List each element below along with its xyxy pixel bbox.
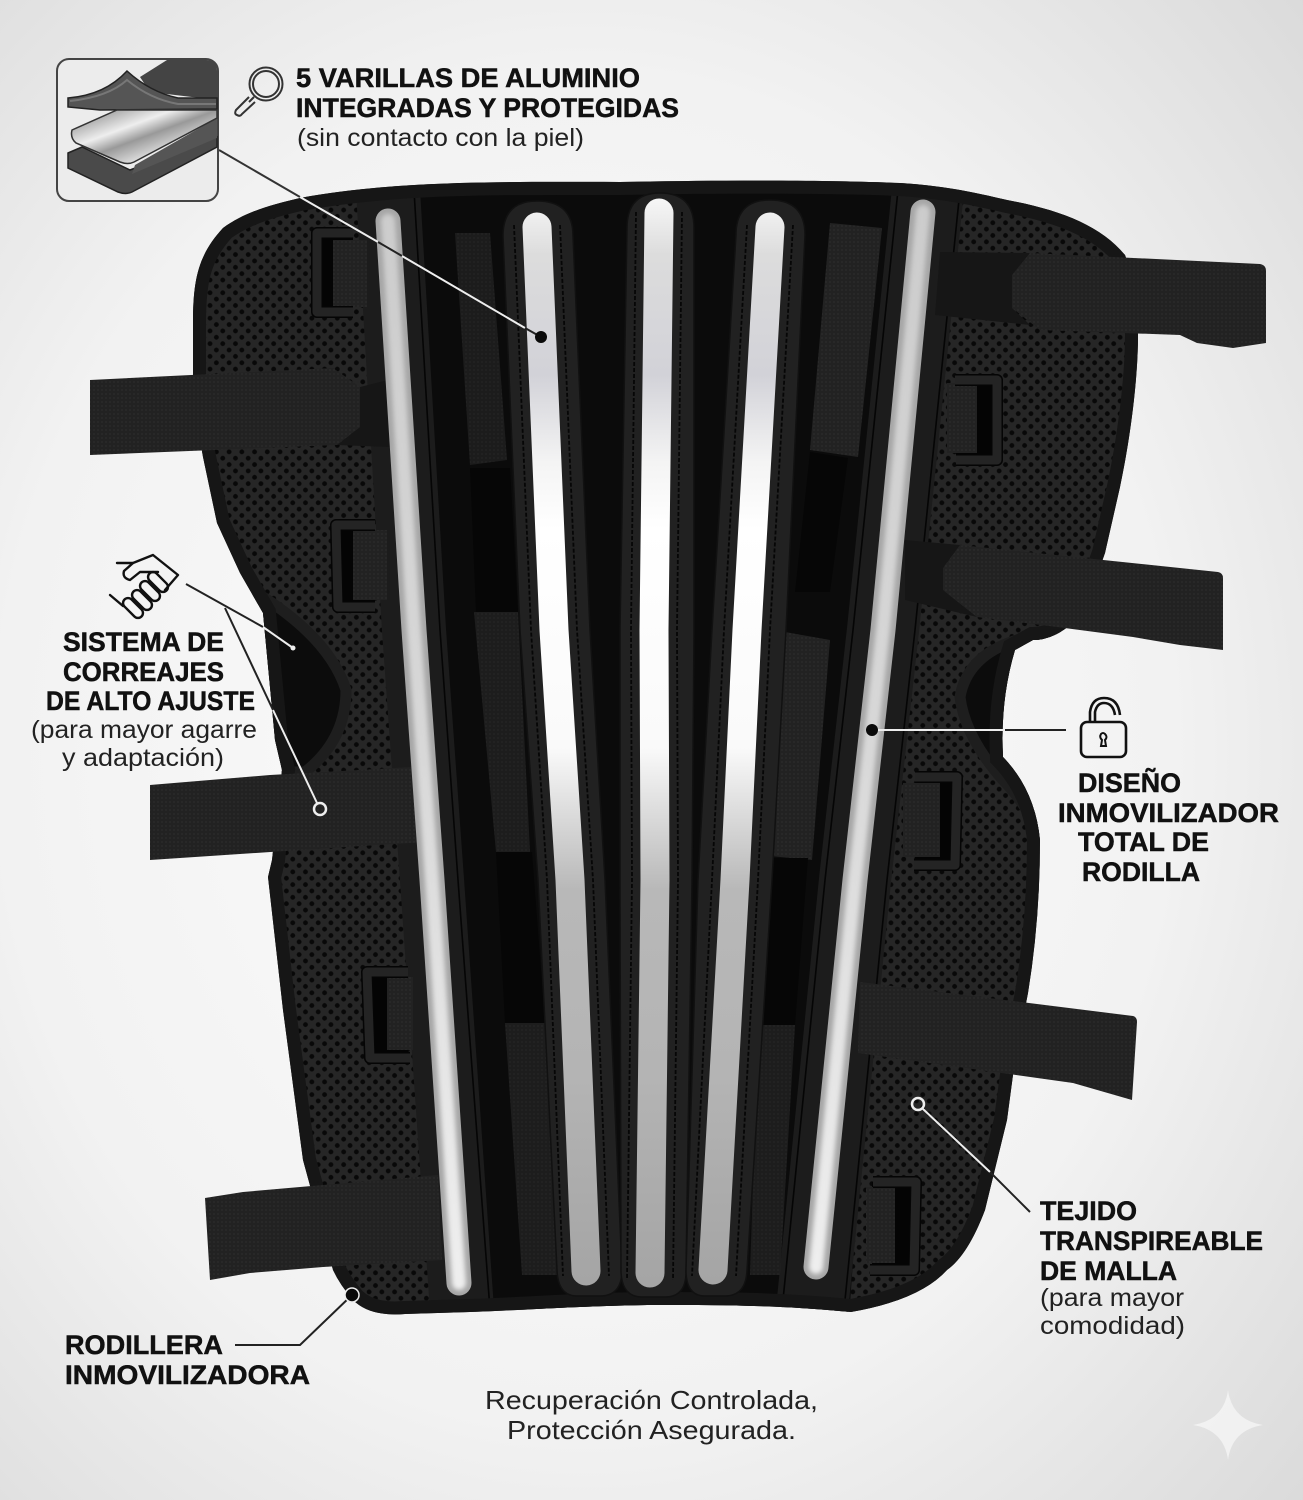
strap left middle	[150, 767, 425, 860]
text: mesh fabric: TRANSPIREABLE	[1040, 1226, 1263, 1256]
leader lines: strap system	[186, 584, 326, 815]
text: mesh fabric: DE MALLA	[1040, 1256, 1177, 1286]
strap right lower	[858, 982, 1137, 1100]
icon: layered fabric cross-section	[57, 59, 218, 201]
icon: open padlock	[1081, 698, 1126, 757]
rod 5	[816, 212, 923, 1267]
strap anchors	[337, 252, 1030, 617]
text: strap system: y adaptación)	[62, 744, 224, 772]
text: immobilizer design: RODILLA	[1082, 857, 1200, 887]
text: immobilizer design: TOTAL DE	[1078, 827, 1209, 857]
strap right middle	[943, 545, 1223, 650]
text: immobilizer design: INMOVILIZADOR	[1058, 798, 1279, 828]
text: immobilizing brace	[65, 1330, 310, 1390]
text: mesh fabric: (para mayor	[1040, 1284, 1184, 1312]
rod 2	[537, 227, 586, 1271]
text: strap system: DE ALTO AJUSTE	[46, 686, 255, 716]
heading: aluminium rods: 5 VARILLAS DE ALUMINIO	[296, 63, 640, 93]
tagline	[485, 1385, 818, 1445]
leader line: immobilizing brace	[235, 1288, 359, 1345]
text: mesh fabric	[1040, 1196, 1263, 1340]
D-ring buckles and tabs	[317, 233, 997, 1270]
text: strap system	[31, 627, 257, 772]
text: mesh fabric: comodidad)	[1040, 1312, 1185, 1340]
rod 3	[650, 213, 659, 1273]
casing stitching	[514, 212, 793, 1280]
brace body with mesh and binding	[180, 170, 1150, 1330]
aluminium rods	[388, 212, 923, 1283]
strap right top	[1012, 253, 1266, 348]
heading: aluminium rods: INTEGRADAS Y PROTEGIDAS	[296, 93, 679, 123]
text: immobilizing brace: INMOVILIZADORA	[65, 1360, 310, 1390]
leader line: aluminium rods	[219, 150, 547, 343]
strap left lower	[205, 1175, 442, 1280]
tagline: Recuperación Controlada,	[485, 1385, 818, 1415]
heading: aluminium rods: (sin contacto con la piel)	[297, 124, 584, 152]
leader line: immobilizer design	[866, 724, 1066, 736]
velcro patches	[455, 223, 882, 1275]
icon: sparkle watermark	[1193, 1390, 1263, 1460]
rod 1	[388, 221, 459, 1283]
panel: knee brace product	[90, 170, 1266, 1330]
text: immobilizing brace: RODILLERA	[65, 1330, 223, 1360]
text: strap system: SISTEMA DE	[63, 627, 224, 657]
leader line: mesh fabric	[912, 1098, 1030, 1212]
tagline: Protección Asegurada.	[507, 1415, 796, 1445]
straps	[90, 253, 1266, 1280]
strap left upper	[90, 368, 360, 455]
text: immobilizer design	[1058, 767, 1279, 887]
heading: aluminium rods	[296, 63, 679, 152]
icon: handshake	[110, 555, 178, 620]
icon: magnifying glass	[235, 68, 282, 116]
text: mesh fabric: TEJIDO	[1040, 1196, 1137, 1226]
text: strap system: (para mayor agarre	[31, 716, 257, 744]
rod 4	[713, 227, 770, 1270]
rod casings	[503, 193, 805, 1297]
text: strap system: CORREAJES	[63, 657, 224, 687]
text: immobilizer design: DISEÑO	[1078, 767, 1181, 798]
